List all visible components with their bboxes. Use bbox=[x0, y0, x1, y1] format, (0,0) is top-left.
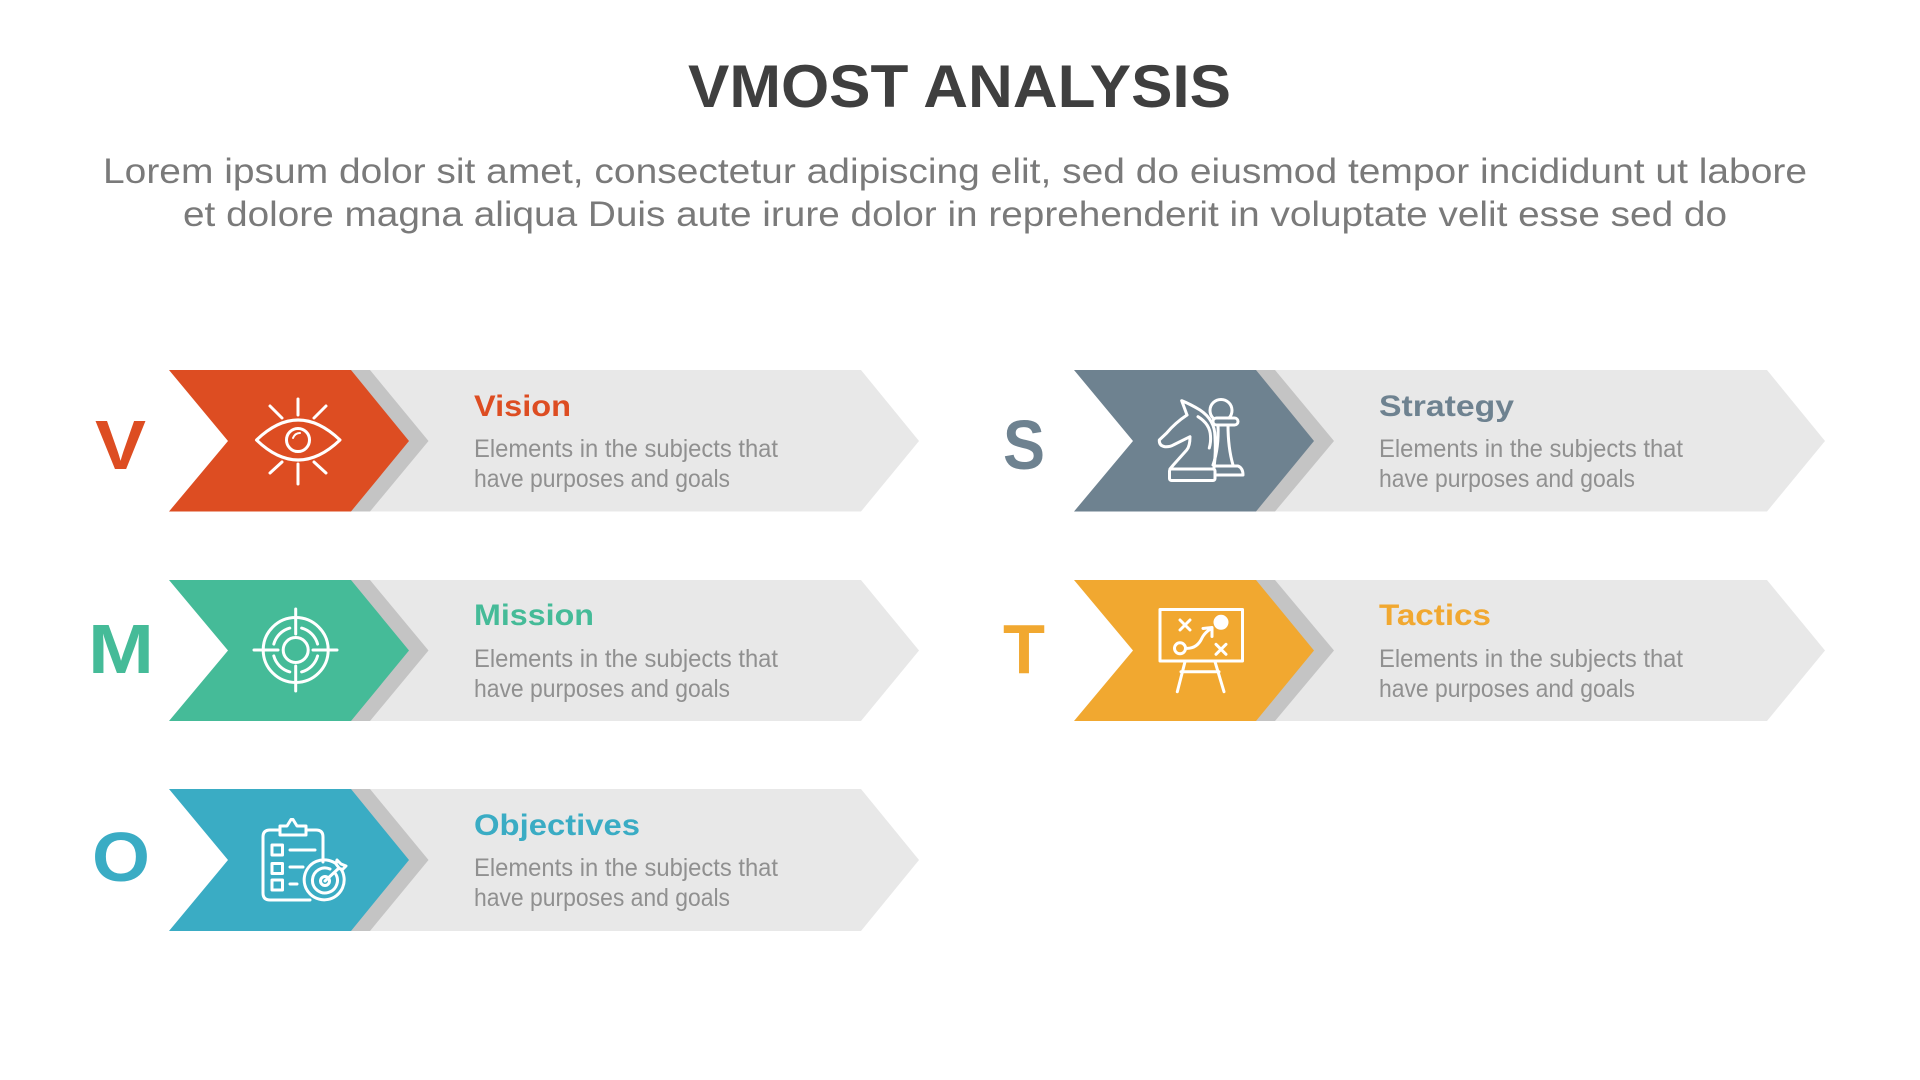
strategy colour chevron bbox=[1074, 370, 1314, 512]
letter M: M bbox=[88, 610, 154, 688]
vision description: Elements in the subjects that bbox=[474, 435, 778, 463]
objectives shadow chevron bbox=[351, 789, 428, 931]
panel: mission bbox=[88, 580, 919, 721]
tactics heading: Tactics bbox=[1379, 599, 1491, 632]
vision heading: Vision bbox=[474, 390, 571, 423]
subtitle text bbox=[103, 152, 1807, 234]
vision description bbox=[474, 435, 778, 493]
objectives description: Elements in the subjects that bbox=[474, 854, 778, 882]
panel: strategy bbox=[1003, 370, 1825, 512]
icon: tactics board bbox=[1160, 610, 1242, 692]
letter T: T bbox=[1003, 610, 1045, 688]
strategy description: have purposes and goals bbox=[1379, 465, 1635, 493]
objectives description bbox=[474, 854, 778, 912]
icon: target crosshair bbox=[254, 609, 337, 691]
panel: vision bbox=[95, 370, 919, 512]
tactics description bbox=[1379, 645, 1683, 703]
objectives grey arrow bbox=[370, 789, 919, 931]
letter S: S bbox=[1003, 406, 1045, 484]
icon: eye bbox=[256, 399, 340, 484]
mission heading: Mission bbox=[474, 599, 594, 632]
panel: objectives bbox=[92, 789, 919, 931]
mission description bbox=[474, 645, 778, 703]
mission grey arrow bbox=[370, 580, 919, 721]
strategy grey arrow bbox=[1275, 370, 1825, 512]
strategy shadow chevron bbox=[1256, 370, 1334, 512]
mission description: Elements in the subjects that bbox=[474, 645, 778, 673]
tactics grey arrow bbox=[1275, 580, 1825, 721]
tactics description: Elements in the subjects that bbox=[1379, 645, 1683, 673]
objectives colour chevron bbox=[169, 789, 409, 931]
tactics shadow chevron bbox=[1256, 580, 1334, 721]
strategy heading: Strategy bbox=[1379, 390, 1514, 423]
tactics description: have purposes and goals bbox=[1379, 675, 1635, 703]
tactics colour chevron bbox=[1074, 580, 1314, 721]
icon: chess knight and pawn bbox=[1159, 399, 1243, 480]
icon: clipboard with target bbox=[263, 820, 346, 900]
mission description: have purposes and goals bbox=[474, 675, 730, 703]
objectives heading: Objectives bbox=[474, 809, 640, 842]
vision colour chevron bbox=[169, 370, 409, 512]
strategy description: Elements in the subjects that bbox=[1379, 435, 1683, 463]
panel: tactics bbox=[1003, 580, 1825, 721]
vision description: have purposes and goals bbox=[474, 465, 730, 493]
vision grey arrow bbox=[370, 370, 919, 512]
mission colour chevron bbox=[169, 580, 409, 721]
letter V: V bbox=[95, 406, 146, 484]
letter O: O bbox=[92, 818, 150, 896]
title: VMOST ANALYSIS bbox=[688, 53, 1231, 120]
objectives description: have purposes and goals bbox=[474, 884, 730, 912]
vision shadow chevron bbox=[351, 370, 428, 512]
subtitle text: et dolore magna aliqua Duis aute irure dolor in reprehenderit in voluptate velit esse sed do bbox=[183, 195, 1727, 234]
subtitle text: Lorem ipsum dolor sit amet, consectetur adipiscing elit, sed do eiusmod tempor incididunt ut labore bbox=[103, 152, 1807, 191]
strategy description bbox=[1379, 435, 1683, 493]
mission shadow chevron bbox=[351, 580, 428, 721]
